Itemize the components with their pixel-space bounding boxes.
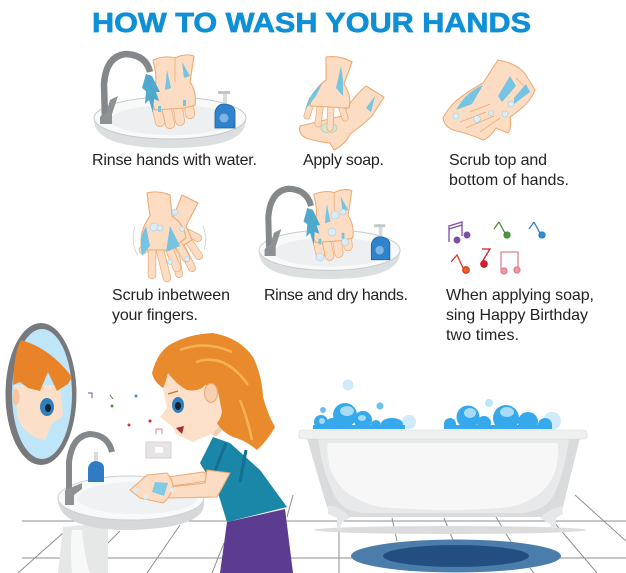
bathtub [299, 430, 587, 534]
step 4 caption: Scrub inbetween [112, 287, 230, 304]
floor tile lines [18, 495, 626, 573]
neck and face [205, 400, 226, 437]
bath foam bubbles [313, 380, 561, 432]
step 6 caption: sing Happy Birthday [446, 307, 588, 324]
small music notes near girl [88, 393, 162, 434]
bath rug [351, 540, 561, 572]
mirror [6, 323, 76, 465]
step 3 caption [449, 152, 569, 189]
step 6 caption: two times. [446, 327, 519, 344]
step 6 illustration: musical notes [449, 222, 545, 274]
step 4 illustration: scrub between fingers [133, 192, 206, 278]
pedestal sink with faucet and soap [58, 434, 204, 573]
step 1 illustration: rinse hands at sink [94, 54, 246, 148]
step 6 caption [446, 287, 594, 344]
eye [172, 397, 184, 413]
mouth [176, 426, 184, 434]
title: HOW TO WASH YOUR HANDS [92, 7, 531, 38]
skirt [220, 509, 293, 573]
hair [152, 333, 275, 450]
step 6 caption: When applying soap, [446, 287, 594, 304]
front arm [167, 470, 230, 498]
brow [168, 391, 178, 394]
step 2 caption: Apply soap. [303, 152, 384, 169]
light switch [146, 442, 171, 458]
step 2 illustration: apply soap [300, 57, 384, 150]
step 3 illustration: scrub top and bottom of hands [443, 60, 535, 140]
step 4 caption [112, 287, 230, 324]
hands with soap [130, 473, 173, 503]
girl washing hands [130, 333, 293, 573]
step 3 caption: Scrub top and [449, 152, 547, 169]
shirt [200, 437, 287, 522]
step 5 illustration: rinse and dry hands at sink [259, 189, 400, 279]
step 4 caption: your fingers. [112, 307, 198, 324]
step 5 caption: Rinse and dry hands. [264, 287, 408, 304]
rear arm [168, 472, 215, 486]
step 3 caption: bottom of hands. [449, 172, 569, 189]
ear [204, 384, 218, 402]
step 1 caption: Rinse hands with water. [92, 152, 257, 169]
